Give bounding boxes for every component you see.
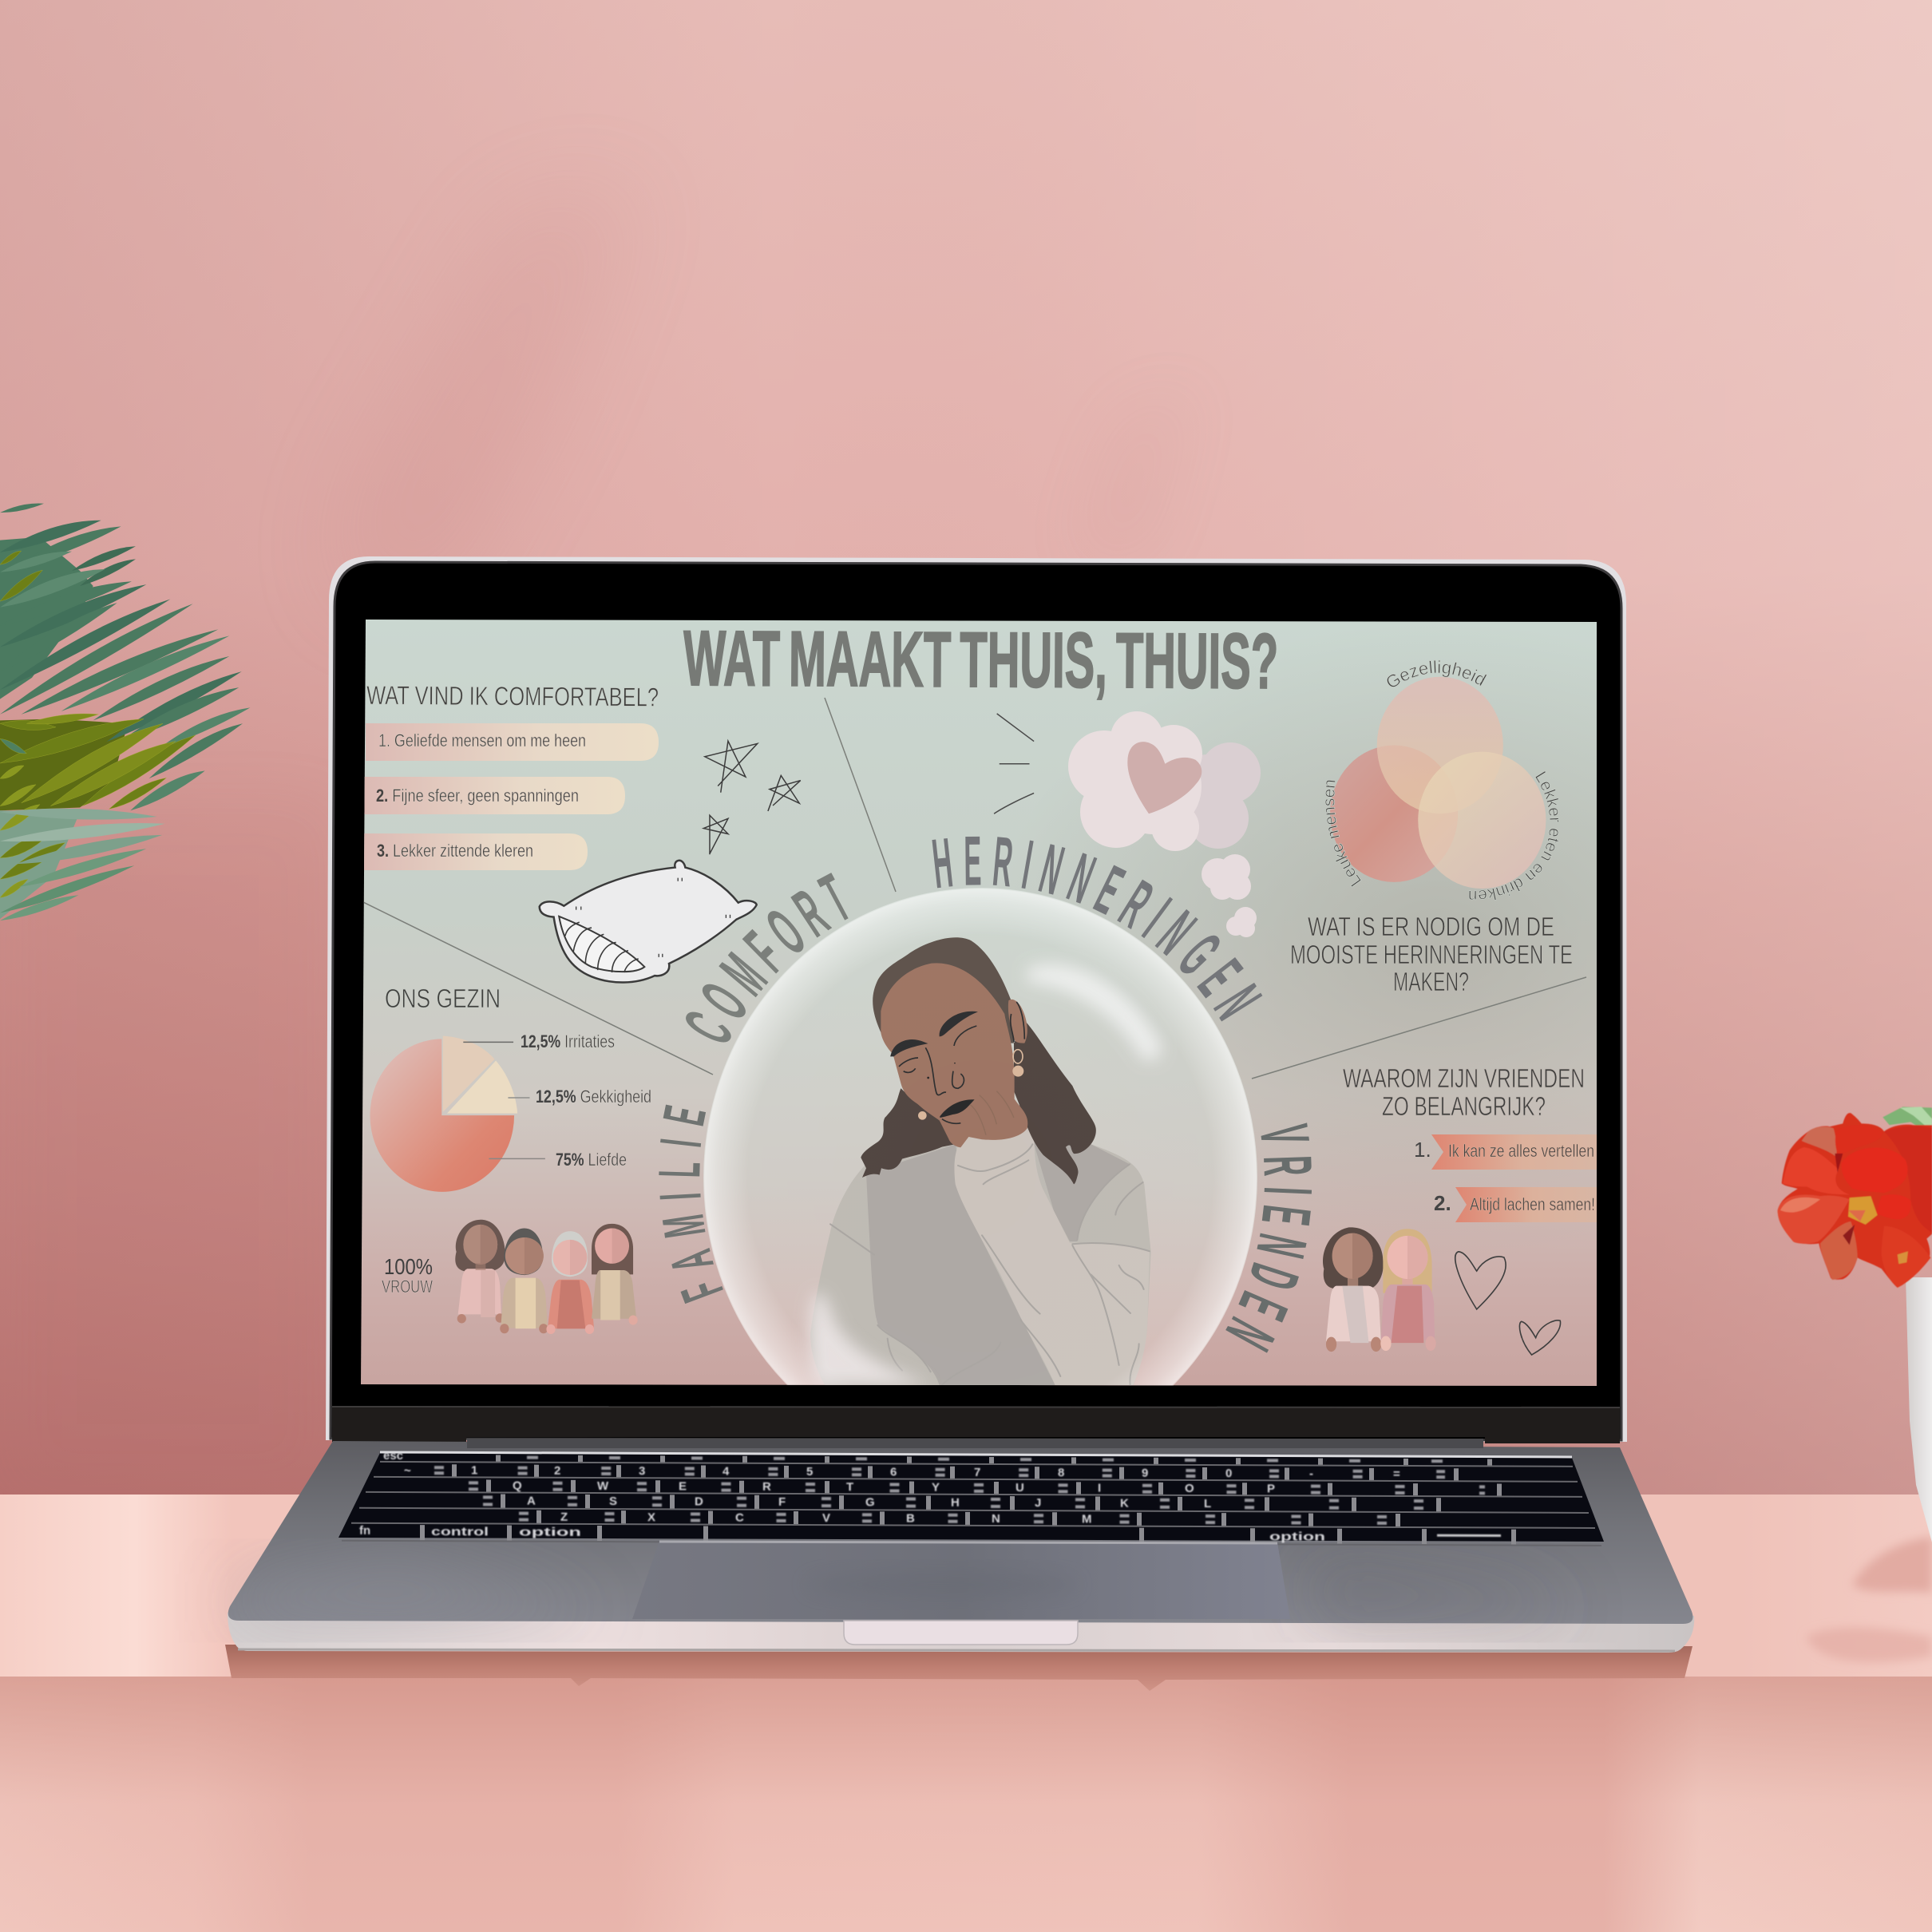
key legends: 5 xyxy=(806,1465,813,1479)
title: WAT MAAKT THUIS, THUIS? xyxy=(683,614,1278,705)
key legends: I xyxy=(1098,1482,1101,1495)
keyboard xyxy=(338,1449,1604,1546)
key legends: 7 xyxy=(974,1466,980,1479)
stat: 100% vrouw: VROUW xyxy=(382,1277,433,1297)
ribbon 1: Ik kan ze alles vertellen xyxy=(1448,1141,1594,1161)
ribbon 1 xyxy=(1414,1134,1597,1170)
key legends: D xyxy=(695,1495,703,1509)
panel: comfortabel xyxy=(364,680,659,870)
key legends: option xyxy=(1269,1530,1325,1544)
key legends: V xyxy=(822,1511,830,1525)
key secondary legends xyxy=(434,1457,1485,1523)
pie label: liefde: 75% Liefde xyxy=(556,1150,627,1170)
hinge notch xyxy=(467,1439,1483,1448)
raised arm sleeve xyxy=(954,1104,1150,1385)
key legends: U xyxy=(1015,1481,1024,1495)
icon: friends figures xyxy=(1323,1227,1436,1352)
key legends: L xyxy=(1204,1497,1211,1510)
pie label: irritaties: 12,5% Irritaties xyxy=(521,1031,615,1051)
key legends: 1 xyxy=(471,1463,477,1477)
key legends: M xyxy=(1082,1512,1091,1526)
key legends xyxy=(359,1449,1501,1545)
key gaps xyxy=(342,1455,1601,1546)
key legends: esc xyxy=(383,1449,403,1463)
stat: 100% vrouw: 100% xyxy=(384,1254,433,1279)
person illustration xyxy=(810,937,1151,1385)
arc label: comfort: COMFORT xyxy=(686,873,849,1043)
icon: thought cloud with heart xyxy=(994,711,1261,937)
ribbon 2: Altijd lachen samen! xyxy=(1470,1194,1595,1214)
screen background xyxy=(361,620,1597,1386)
friend 1 xyxy=(1323,1227,1384,1352)
stat: 100% vrouw xyxy=(382,1254,433,1297)
bubble base tint xyxy=(703,888,1257,1467)
key legends: W xyxy=(597,1479,609,1493)
key legends: fn xyxy=(359,1524,370,1538)
deck blotches xyxy=(240,1565,1581,1617)
face lines xyxy=(892,1002,1024,1135)
key legends: - xyxy=(1309,1467,1313,1481)
key legends: 3 xyxy=(639,1464,645,1478)
key legends: 2 xyxy=(554,1464,560,1478)
key legends: O xyxy=(1185,1482,1194,1495)
key legends: 9 xyxy=(1142,1467,1148,1480)
table front face xyxy=(0,1677,1932,1932)
list item 3 xyxy=(364,833,588,870)
bubble glass rim xyxy=(703,888,1257,1467)
lid opening notch xyxy=(844,1621,1078,1645)
key legends: = xyxy=(1393,1467,1400,1481)
heading: herinneringen question xyxy=(1290,912,1573,996)
heading: vrienden question: WAAROM ZIJN VRIENDEN xyxy=(1343,1063,1585,1093)
heading: herinneringen question: MOOISTE HERINNERINGEN TE xyxy=(1290,940,1573,969)
panel: ons gezin xyxy=(370,984,651,1334)
key legends: J xyxy=(1035,1496,1041,1510)
key legends: E xyxy=(679,1479,687,1493)
key legends: S xyxy=(609,1495,617,1508)
key legends: C xyxy=(735,1511,744,1525)
heading: ons gezin: ONS GEZIN xyxy=(385,984,501,1013)
figure 4 xyxy=(592,1224,638,1325)
key legends: B xyxy=(906,1512,915,1526)
key legends: option xyxy=(519,1526,581,1539)
key legends: P xyxy=(1267,1482,1275,1495)
key legends: G xyxy=(865,1495,875,1509)
key legends: 8 xyxy=(1058,1466,1064,1479)
list item 1: 1. Geliefde mensen om me heen xyxy=(378,730,586,750)
ribbon 2 xyxy=(1434,1187,1597,1222)
key legends: 6 xyxy=(890,1465,897,1479)
pie chart xyxy=(370,1035,545,1192)
earrings xyxy=(918,1050,1023,1120)
figure 3 xyxy=(546,1231,594,1334)
front edge xyxy=(228,1613,1694,1653)
key legends: T xyxy=(846,1480,853,1494)
trackpad xyxy=(632,1541,1290,1619)
arc label: herinneringen: HERINNERINGEN xyxy=(932,837,1263,1022)
icon: family figures xyxy=(455,1220,638,1334)
ribbon 2: 2. xyxy=(1434,1191,1451,1215)
arc label: familie: FAMILIE xyxy=(659,1105,723,1304)
key legends: X xyxy=(647,1510,655,1524)
key legends: Y xyxy=(932,1481,940,1495)
laptop lid xyxy=(326,556,1627,1442)
bubble with person xyxy=(703,888,1257,1467)
sweater lines xyxy=(830,1144,1150,1385)
key legends: R xyxy=(762,1480,771,1494)
laptop hinge strip xyxy=(332,1407,1620,1443)
figure 1 xyxy=(455,1220,505,1323)
list item 3: 3. Lekker zittende kleren xyxy=(377,841,533,861)
chart: venn diagram: Lekker eten en drinken xyxy=(1469,771,1558,901)
list item 1 xyxy=(366,723,659,761)
hair back xyxy=(861,937,1096,1184)
laptop base xyxy=(228,1439,1694,1653)
bubble highlight upper right xyxy=(1027,964,1161,1060)
divider lines xyxy=(363,698,1586,1079)
key legends: A xyxy=(527,1495,536,1508)
icon: pillow xyxy=(540,861,757,983)
chart: venn diagram: Leuke mensen xyxy=(1325,781,1362,888)
key legends: ~ xyxy=(404,1464,411,1478)
key legends: F xyxy=(778,1495,786,1509)
laptop screen: infographic xyxy=(361,620,1597,1386)
key legends: Z xyxy=(560,1510,568,1524)
background: pink wall xyxy=(0,0,1932,1501)
figure 2 xyxy=(500,1229,548,1333)
arc label: vrienden: VRIENDEN xyxy=(1225,1122,1312,1353)
flower xyxy=(1778,1107,1932,1288)
icon: hearts xyxy=(1455,1252,1561,1355)
friend 2 xyxy=(1380,1229,1436,1351)
table surface xyxy=(0,1495,1932,1678)
vase shadows on table xyxy=(1806,1537,1932,1662)
bubble highlight lower left xyxy=(810,1293,932,1385)
chart: venn diagram xyxy=(1325,660,1558,901)
key legends: Q xyxy=(513,1479,522,1493)
key legends: control xyxy=(431,1525,489,1538)
heading: herinneringen question: MAKEN? xyxy=(1393,967,1469,996)
heading: vrienden question xyxy=(1343,1063,1585,1121)
face and hand xyxy=(881,963,1027,1147)
chart: venn diagram: Gezelligheid xyxy=(1388,660,1487,687)
vase xyxy=(1906,1277,1932,1542)
panel: vrienden xyxy=(1343,1063,1597,1222)
pie label: gekkigheid: 12,5% Gekkigheid xyxy=(536,1087,651,1107)
deck xyxy=(228,1441,1692,1624)
heading: comfortabel: WAT VIND IK COMFORTABEL? xyxy=(366,680,659,712)
icon: stars xyxy=(703,741,801,854)
key legends: 0 xyxy=(1225,1467,1232,1480)
key legends: K xyxy=(1120,1497,1129,1510)
list item 2 xyxy=(364,777,625,814)
heading: herinneringen question: WAT IS ER NODIG OM DE xyxy=(1308,912,1554,941)
heading: vrienden question: ZO BELANGRIJK? xyxy=(1382,1091,1546,1121)
ribbon 1: 1. xyxy=(1414,1138,1431,1162)
key legends: H xyxy=(951,1496,960,1510)
key legends: 4 xyxy=(723,1465,730,1479)
sweater body xyxy=(810,1139,1151,1385)
list item 2: 2. Fijne sfeer, geen spanningen xyxy=(376,786,579,806)
shadow under laptop xyxy=(225,1645,1692,1691)
key legends: N xyxy=(992,1512,1000,1526)
plant: palm leaves xyxy=(0,503,250,920)
